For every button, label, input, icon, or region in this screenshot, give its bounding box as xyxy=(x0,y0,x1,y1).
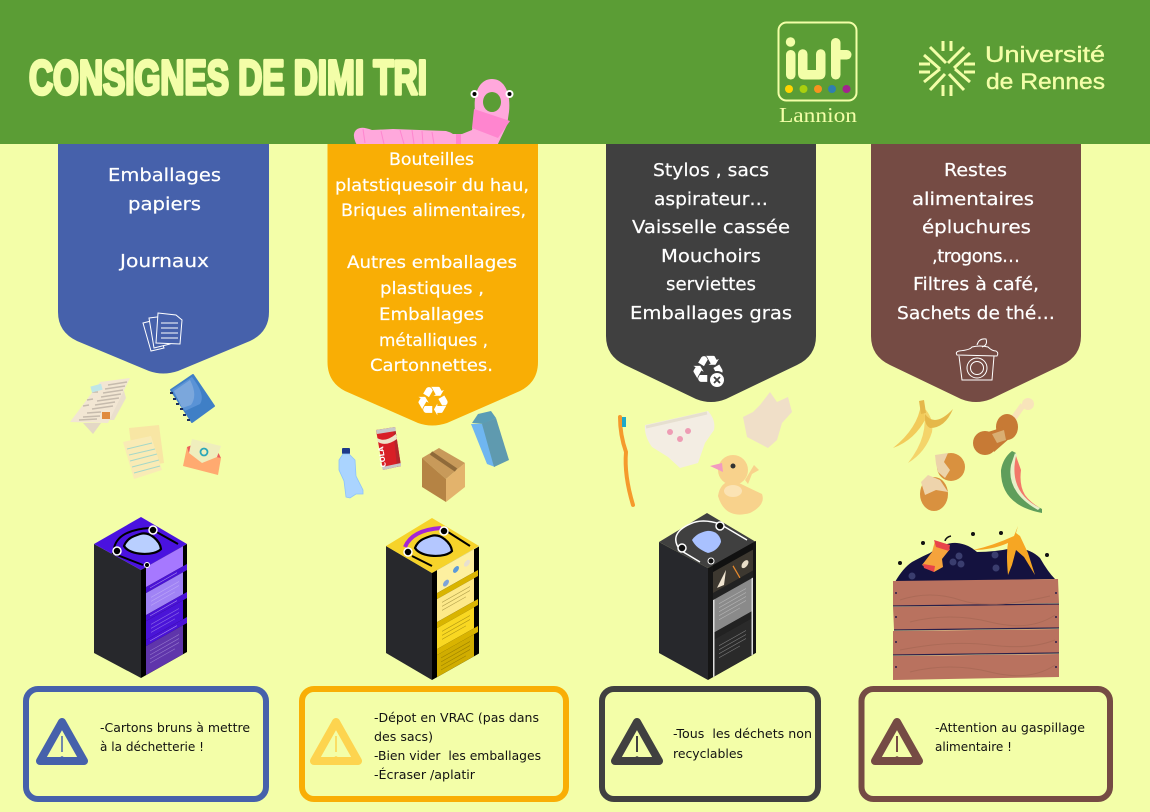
callout: recyclables: -Écraser /aplatir xyxy=(374,767,475,782)
panel: recyclables (yellow) xyxy=(328,144,538,426)
callout: recyclables: des sacs) xyxy=(374,730,433,744)
flies xyxy=(898,531,1049,565)
items: residual waste xyxy=(620,392,792,515)
panel: recyclables (yellow): métalliques , xyxy=(379,331,488,351)
panel: papiers (blue): Journaux xyxy=(119,251,209,272)
panel: recyclables (yellow): Autres emballages xyxy=(347,253,517,273)
panel: papiers (blue): Emballages xyxy=(108,165,221,186)
callout: recyclables: -Dépot en VRAC (pas dans xyxy=(374,711,539,725)
bin: residual xyxy=(659,513,756,680)
bin: papers xyxy=(94,517,187,678)
icon: newspaper xyxy=(70,378,130,434)
items: paper waste xyxy=(70,375,221,479)
logo: Université de Rennes: de Rennes xyxy=(986,69,1105,94)
icon: banana peel xyxy=(893,400,953,463)
icon: university star xyxy=(919,41,975,96)
callout: residual: -Tous les déchets non xyxy=(673,727,812,741)
panel: ordures (dark): Mouchoirs xyxy=(661,246,761,267)
callout: compost: -Attention au gaspillage xyxy=(935,721,1085,735)
icon: cardboard box xyxy=(422,448,465,502)
icon: chicken drumstick xyxy=(973,398,1034,455)
wooden planks xyxy=(893,579,1059,680)
icon: crumpled tissue xyxy=(743,392,792,448)
panel: compost (brown): Restes xyxy=(944,160,1007,181)
title: CONSIGNES DE DIMI TRI xyxy=(29,52,427,105)
callout: papers: -Cartons bruns à mettre xyxy=(100,721,250,735)
panel: recyclables (yellow): Emballages xyxy=(379,305,484,325)
compost bin xyxy=(893,526,1059,680)
icon: watermelon slice xyxy=(1001,451,1042,513)
panel: ordures (dark): aspirateur… xyxy=(654,189,768,210)
callout: compost: alimentaire ! xyxy=(935,740,1012,754)
panel: recyclables (yellow): Briques alimentaires, xyxy=(341,201,526,221)
icon: pink worm xyxy=(354,79,514,150)
callout: papers: à la déchetterie ! xyxy=(100,740,204,754)
panel: compost (brown): Filtres à café, xyxy=(913,274,1039,295)
logo: Université de Rennes: Université xyxy=(985,42,1105,67)
icon: warning xyxy=(40,722,84,761)
panel: ordures (dark): Emballages gras xyxy=(630,303,792,324)
callout: papers xyxy=(26,689,266,799)
icon: milk carton xyxy=(471,411,509,467)
callout: recyclables xyxy=(302,689,566,799)
icon: cola can: COLA xyxy=(377,445,388,468)
panel: recyclables (yellow): plastiques , xyxy=(380,279,484,299)
icon: egg shells xyxy=(920,453,965,511)
apple core xyxy=(922,536,951,572)
callout: residual: recyclables xyxy=(673,747,743,761)
icon: lined notes xyxy=(123,425,164,479)
icon: rubber duck xyxy=(710,455,763,515)
items: organic waste xyxy=(893,398,1042,513)
bin face labels xyxy=(708,541,756,680)
items: recyclable waste xyxy=(339,411,509,502)
panel: compost (brown): ,trogons… xyxy=(932,246,1020,267)
panel: recyclables (yellow): Cartonnettes. xyxy=(370,356,493,376)
panel: recyclables (yellow): Bouteilles xyxy=(389,150,474,170)
logo: IUT Lannion xyxy=(778,22,858,127)
icon: warning xyxy=(875,722,919,761)
panel: recyclables (yellow): platstiquesoir du hau, xyxy=(335,176,529,196)
icon: warning xyxy=(615,722,659,761)
icon: plastic bottle xyxy=(339,448,363,498)
icon: compost pot xyxy=(956,339,998,380)
panel: papiers (blue): papiers xyxy=(128,194,201,215)
panel: compost (brown): alimentaires xyxy=(912,189,1034,210)
panel: papiers (blue) xyxy=(58,144,269,374)
icon: diaper xyxy=(645,411,714,468)
bin: recyclables xyxy=(386,518,479,680)
icon: paper sheets xyxy=(143,313,182,351)
callout: recyclables: -Bien vider les emballages xyxy=(374,749,541,763)
banana peel xyxy=(973,526,1035,575)
panel: ordures (dark): serviettes xyxy=(666,274,756,295)
logo: IUT Lannion: Lannion xyxy=(779,103,858,127)
panel: ordures (dark) xyxy=(606,144,816,402)
bin face labels xyxy=(432,546,479,680)
icon: warning xyxy=(314,722,358,761)
panel: ordures (dark): Vaisselle cassée xyxy=(632,217,790,238)
header band xyxy=(0,0,1150,144)
icon: envelope xyxy=(183,439,221,475)
bin face labels xyxy=(141,544,187,678)
callout: residual xyxy=(602,689,818,799)
icon: notebook xyxy=(170,375,214,422)
icon: toothbrush xyxy=(620,417,633,505)
panel: compost (brown): épluchures xyxy=(922,217,1031,238)
panel: compost (brown): Sachets de thé… xyxy=(897,303,1055,324)
panel: compost (brown) xyxy=(871,144,1081,402)
icon: crossed recycle: ♻ xyxy=(690,348,726,394)
callout: compost xyxy=(862,689,1110,799)
icon: recycle: ♻ xyxy=(415,379,451,425)
icon: cola can xyxy=(376,427,401,470)
panel: ordures (dark): Stylos , sacs xyxy=(653,160,769,181)
logo: Université de Rennes xyxy=(919,41,1105,96)
